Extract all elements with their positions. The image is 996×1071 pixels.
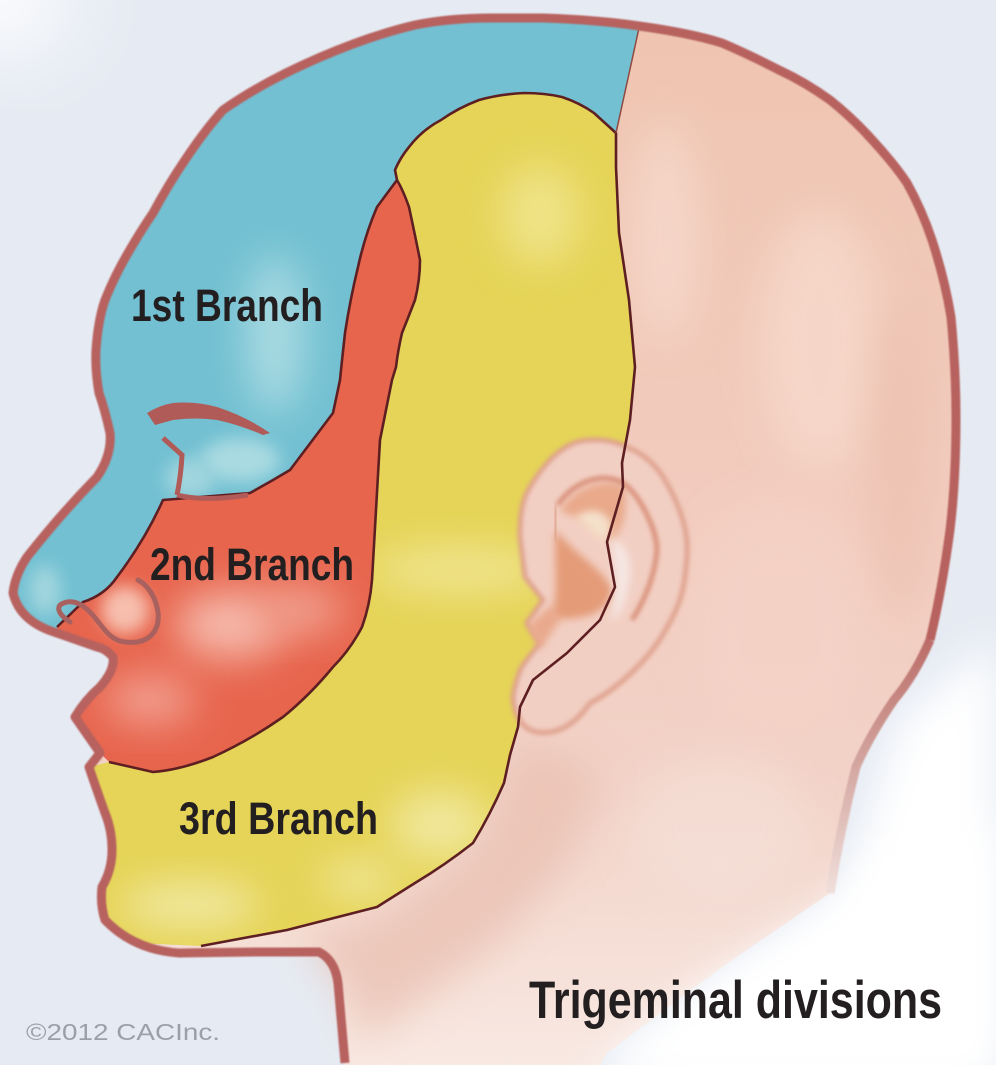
copyright: ©2012 CACInc. bbox=[26, 1019, 220, 1045]
division boundary lines bbox=[57, 93, 635, 946]
icon: ear bbox=[513, 440, 687, 733]
neck shading under the jaw bbox=[300, 740, 600, 1040]
label: 3rd branch: 3rd Branch bbox=[179, 793, 378, 844]
icon: nostril bbox=[59, 580, 158, 642]
label: 2nd branch: 2nd Branch bbox=[150, 539, 354, 590]
region: 1st branch (blue) bbox=[13, 18, 639, 633]
label: 1st branch: 1st Branch bbox=[131, 280, 323, 331]
skin highlights bbox=[630, 120, 925, 900]
region: 3rd branch (yellow) bbox=[89, 93, 635, 946]
region: 2nd branch (red) bbox=[57, 180, 420, 772]
icon: eyebrow and eye bbox=[147, 402, 270, 498]
fade of lower right neck bbox=[590, 820, 996, 1071]
